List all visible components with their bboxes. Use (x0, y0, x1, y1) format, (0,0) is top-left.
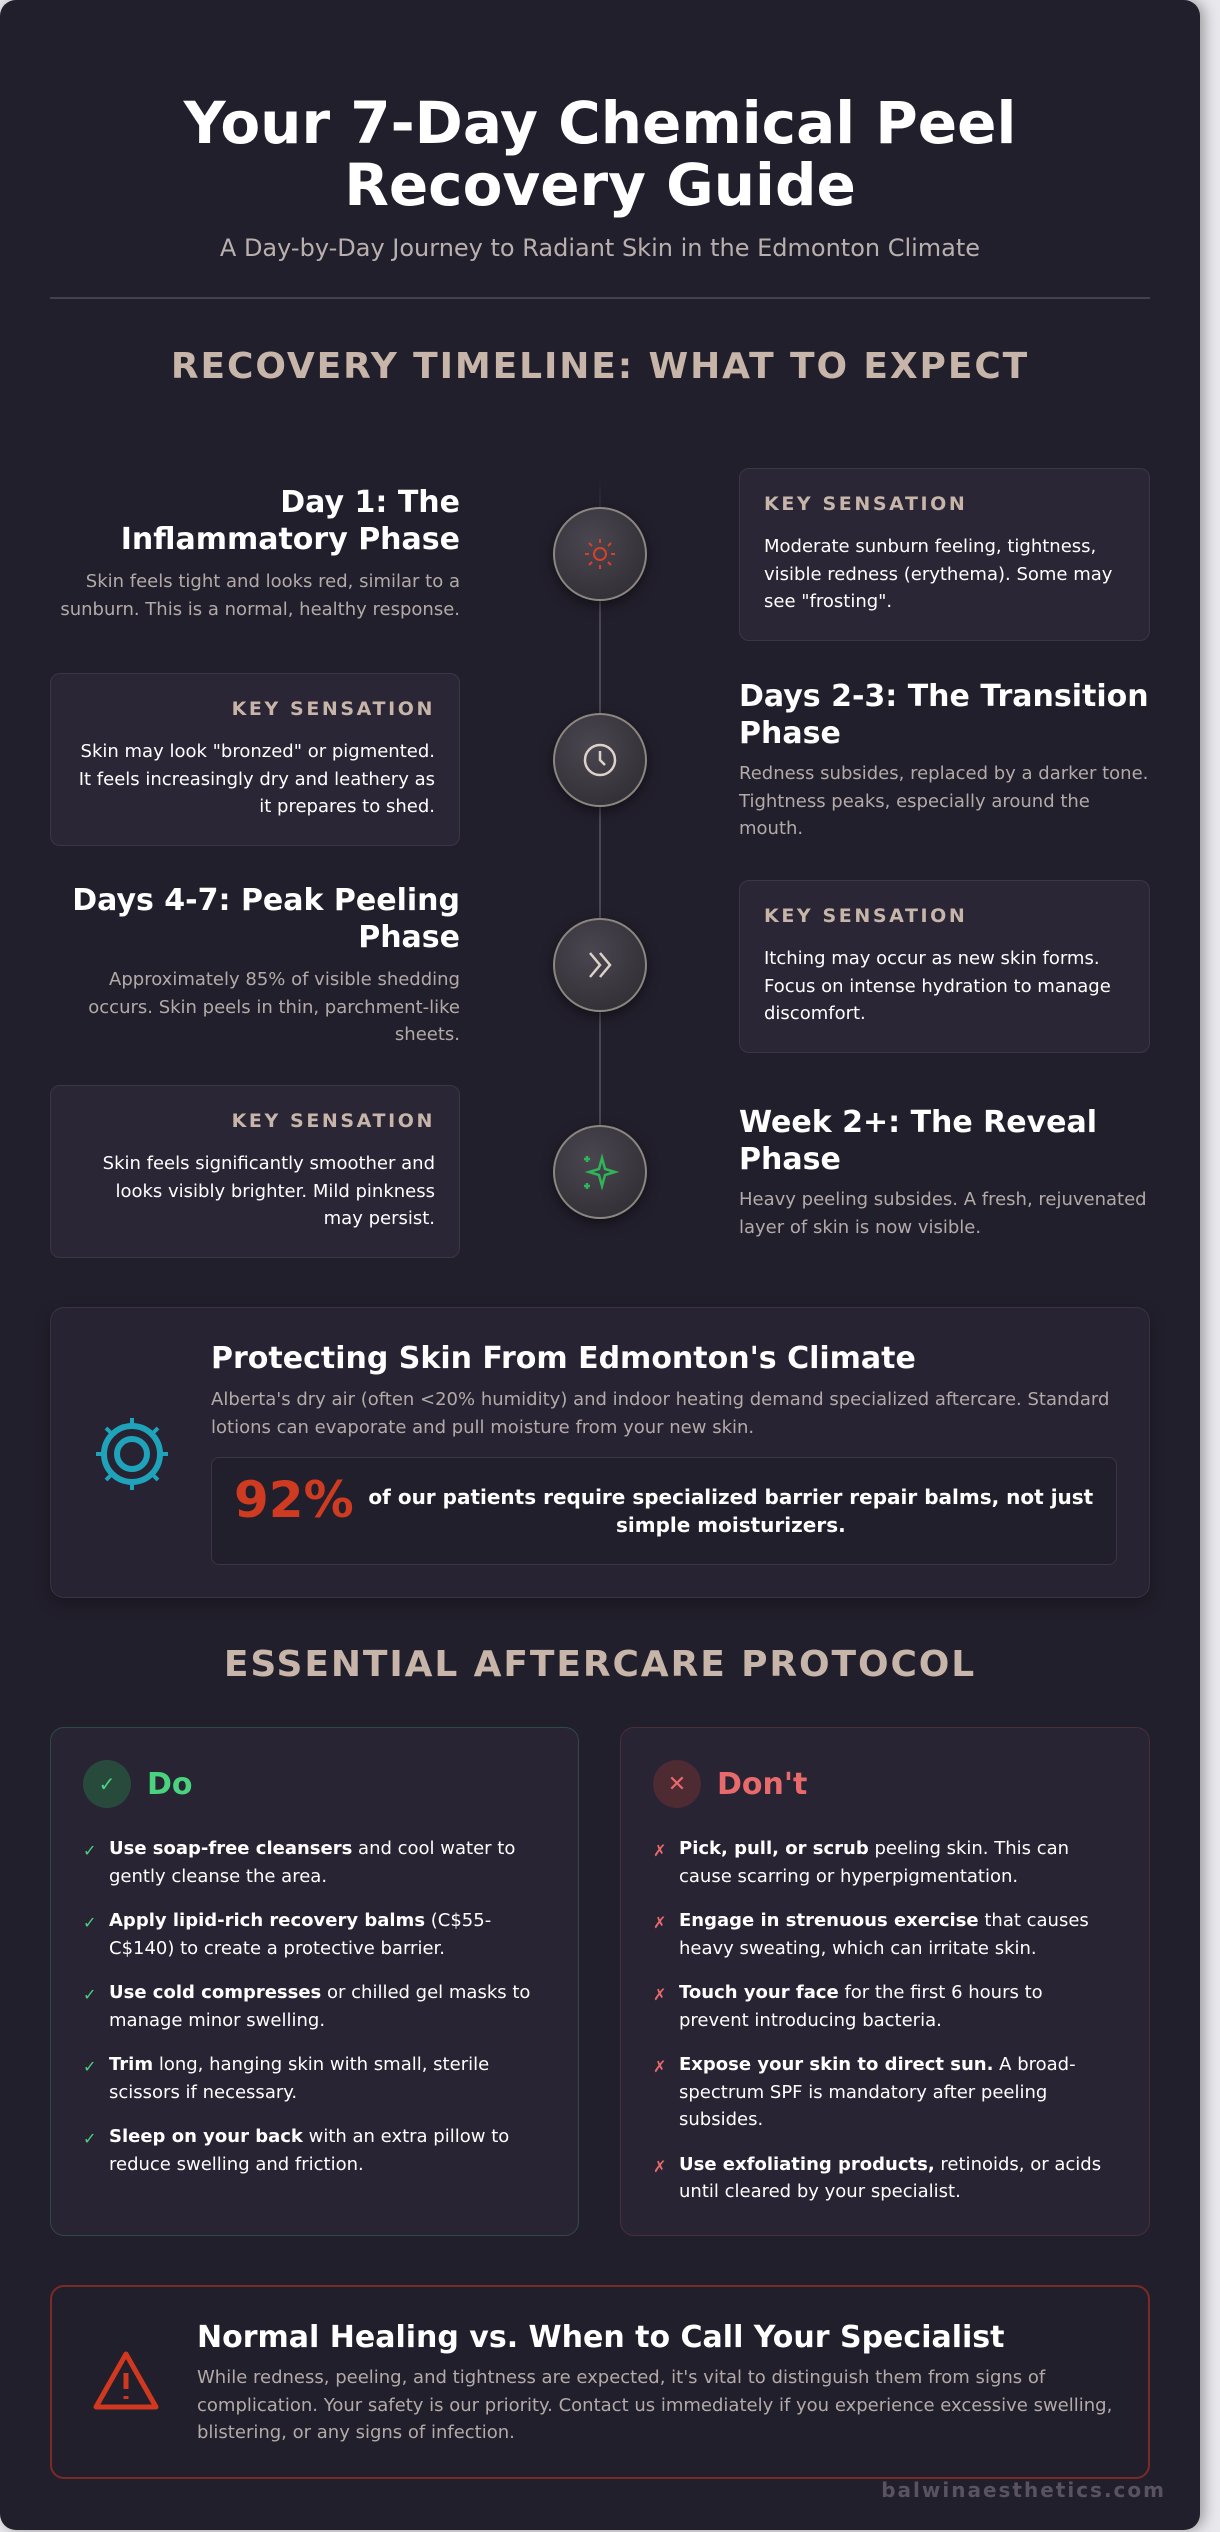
do list: ✓ (83, 2129, 96, 2148)
days 4-7 key sensation: Itching may occur as new skin forms. Focus on intense hydration to manage discomfort. (764, 948, 1111, 1024)
week 2 text: Week 2+: The Reveal (739, 1105, 1097, 1140)
don't list: ✗ (653, 2057, 666, 2076)
week 2 key sensation: KEY SENSATION (232, 1110, 435, 1132)
title (183, 89, 1016, 219)
don't list: ✗ (653, 1913, 666, 1932)
don't list: ✗ (653, 1841, 666, 1860)
do list: ✓ (83, 1985, 96, 2004)
day 2-3 key sensation: KEY SENSATION (232, 698, 435, 720)
don't list: Touch your face for the first 6 hours to prevent introducing bacteria. (679, 1982, 1043, 2030)
do list: Sleep on your back with an extra pillow to reduce swelling and friction. (109, 2126, 509, 2174)
day 1 text: Skin feels tight and looks red, similar to a sunburn. This is a normal, healthy response. (60, 571, 460, 620)
icon: warning triangle (94, 2352, 158, 2410)
days 4-7 text: Days 4-7: Peak Peeling (72, 883, 460, 918)
do list: Use soap-free cleansers and cool water to gently cleanse the area. (109, 1838, 515, 1886)
icon: sparkle (553, 1125, 647, 1219)
don't list: Pick, pull, or scrub peeling skin. This can cause scarring or hyperpigmentation. (679, 1838, 1069, 1886)
stat callout 92%: of our patients require specialized barrier repair balms, not just simple moisturizers. (368, 1485, 1093, 1537)
don't list: Use exfoliating products, retinoids, or acids until cleared by your specialist. (679, 2154, 1101, 2202)
icon: climate gear (96, 1418, 168, 1490)
days 4-7 text: Phase (358, 920, 460, 955)
panel: don't (620, 1727, 1150, 2236)
days 4-7 key sensation: KEY SENSATION (764, 905, 967, 927)
week 2 key sensation (50, 1085, 460, 1258)
week 2 key sensation: Skin feels significantly smoother and looks visibly brighter. Mild pinkness may persist. (103, 1153, 435, 1229)
days 4-7 text: Approximately 85% of visible shedding occurs. Skin peels in thin, parchment-like sheets. (88, 969, 460, 1045)
day 1 text: Inflammatory Phase (121, 522, 460, 557)
don't list (653, 1838, 1101, 2202)
days 2-3 text: Days 2-3: The Transition Phase (739, 679, 1149, 751)
panel: do (50, 1727, 579, 2236)
don't list: Expose your skin to direct sun. A broad-spectrum SPF is mandatory after peeling subsides. (679, 2054, 1076, 2130)
do list (83, 1838, 530, 2174)
day 1 text (60, 485, 460, 620)
week 2 text: Phase (739, 1142, 841, 1177)
week 2 text (739, 1105, 1147, 1238)
warning text: While redness, peeling, and tightness are expected, it's vital to distinguish them from signs of complication. Your safety is our priority. Contact us immediately if you experience excessive swelling, blistering, or any signs of infection. (197, 2367, 1112, 2443)
icon: chevrons (553, 918, 647, 1012)
day 1 key sensation: KEY SENSATION (764, 493, 967, 515)
day 2-3 key sensation (50, 673, 460, 846)
do header: ✓ (99, 1772, 115, 1796)
do list: Apply lipid-rich recovery balms (C$55-C$140) to create a protective barrier. (109, 1910, 491, 1958)
day 1 key sensation: Moderate sunburn feeling, tightness, visible redness (erythema). Some may see "frosting". (764, 536, 1112, 612)
don't list: ✗ (653, 1985, 666, 2004)
icon: sun (553, 507, 647, 601)
day 2-3 key sensation: Skin may look "bronzed" or pigmented. It feels increasingly dry and leathery as it prepares to shed. (79, 741, 435, 817)
days 2-3 text: Redness subsides, replaced by a darker tone. Tightness peaks, especially around the mouth. (739, 763, 1148, 839)
don't list: ✗ (653, 2156, 666, 2176)
day 1 text: Day 1: The (280, 485, 460, 520)
don't header: ✕ (668, 1772, 686, 1796)
icon: clock (553, 713, 647, 807)
stat callout 92% (211, 1457, 1117, 1565)
week 2 text: Heavy peeling subsides. A fresh, rejuvenated layer of skin is now visible. (739, 1189, 1147, 1238)
climate text: Alberta's dry air (often <20% humidity) and indoor heating demand specialized aftercare. Standard lotions can evaporate and pull moisture from your new skin. (211, 1389, 1109, 1438)
panel: climate (50, 1307, 1150, 1598)
day 1 key sensation (739, 468, 1150, 641)
warning heading: Normal Healing vs. When to Call Your Specialist (197, 2320, 1004, 2355)
days 2-3 text (738, 679, 1149, 839)
days 4-7 text (72, 883, 460, 1045)
don't header (653, 1760, 807, 1808)
panel: warning (50, 2285, 1150, 2479)
do header (83, 1760, 193, 1808)
section heading: timeline: RECOVERY TIMELINE: WHAT TO EXPECT (171, 346, 1029, 387)
title: Recovery Guide (344, 151, 856, 219)
do list: Use cold compresses or chilled gel masks to manage minor swelling. (109, 1982, 530, 2030)
do list: ✓ (83, 2057, 96, 2076)
stat callout 92%: 92% (234, 1471, 354, 1529)
days 4-7 key sensation (739, 880, 1150, 1053)
climate heading: Protecting Skin From Edmonton's Climate (211, 1341, 916, 1376)
don't header: Don't (717, 1766, 807, 1802)
do list: ✓ (83, 1841, 96, 1860)
do header: Do (147, 1766, 193, 1802)
do list: ✓ (83, 1913, 96, 1932)
title: Your 7-Day Chemical Peel (184, 89, 1016, 157)
section heading: aftercare: ESSENTIAL AFTERCARE PROTOCOL (224, 1644, 976, 1685)
don't list: Engage in strenuous exercise that causes heavy sweating, which can irritate skin. (679, 1910, 1089, 1958)
do list: Trim long, hanging skin with small, sterile scissors if necessary. (109, 2054, 489, 2102)
subtitle: A Day-by-Day Journey to Radiant Skin in the Edmonton Climate (220, 234, 980, 262)
footer url: balwinaesthetics.com (881, 2478, 1166, 2502)
